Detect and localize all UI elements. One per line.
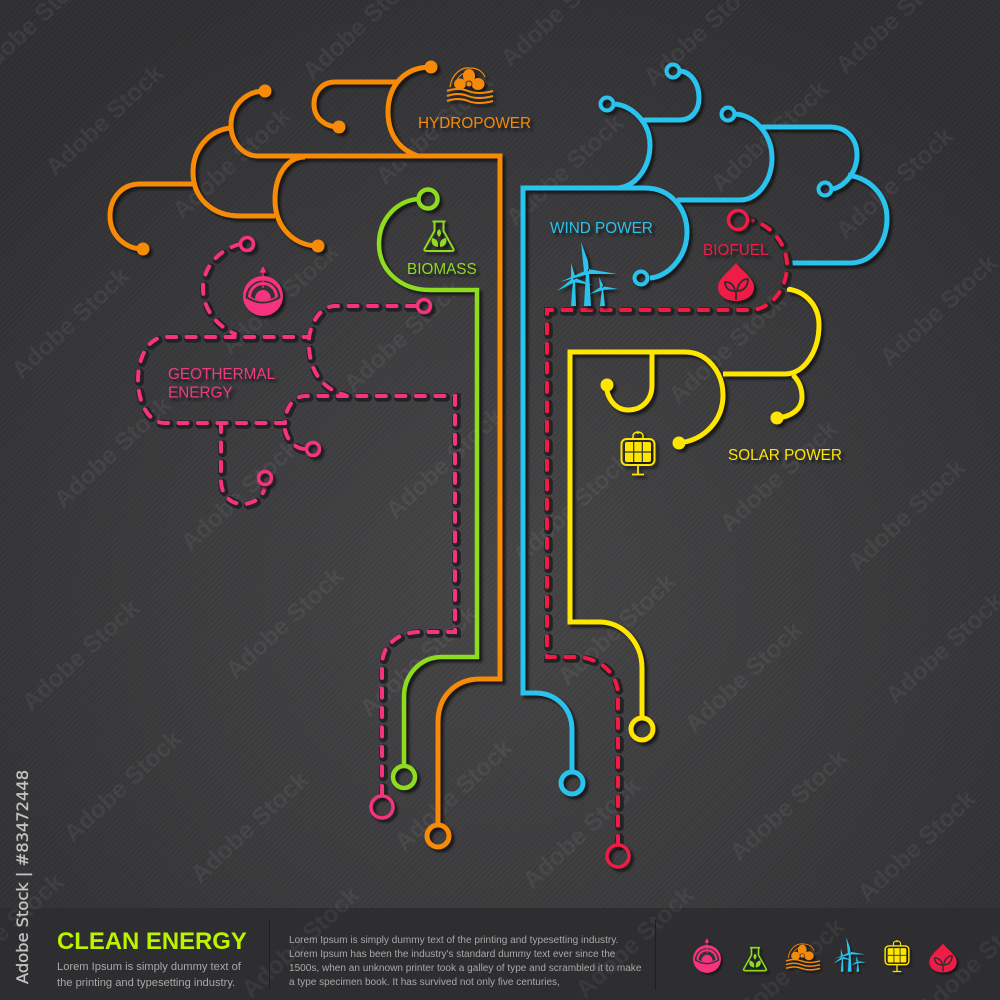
stock watermarks: Adobe Stock	[221, 562, 349, 684]
stock watermarks: Adobe Stock	[875, 249, 1000, 371]
stock watermarks: Adobe Stock	[390, 734, 518, 856]
icon: biofuel drop	[718, 263, 754, 301]
stock watermarks: Adobe Stock	[706, 75, 834, 197]
footer paragraph: 1500s, when an unknown printer took a galley of type and scrambled it to make	[289, 963, 642, 974]
footer icon: drop	[929, 944, 957, 972]
label: hydropower: HYDROPOWER	[418, 115, 531, 132]
stock watermarks: Adobe Stock	[501, 109, 629, 231]
stock watermarks: Adobe Stock	[381, 402, 509, 524]
footer paragraph: a type specimen book. It has survived not only five centuries,	[289, 977, 560, 988]
footer icon: earth	[693, 939, 721, 973]
footer paragraph: Lorem Ipsum has been the industry's standard dummy text ever since the	[289, 949, 616, 960]
footer watermarks: Adobe Stock	[237, 881, 365, 1000]
orange hydropower tree	[110, 60, 500, 847]
footer icon: solar	[885, 940, 909, 971]
label: solar power: SOLAR POWER	[728, 447, 842, 464]
label: geothermal energy: GEOTHERMAL	[168, 366, 275, 383]
label: wind power: WIND POWER	[550, 220, 653, 237]
footer paragraph: Lorem Ipsum is simply dummy text of the printing and typesetting industry.	[289, 935, 618, 946]
footer icon: flask	[744, 948, 766, 971]
stock watermarks: Adobe Stock	[553, 568, 681, 690]
stock watermarks: Adobe Stock	[355, 600, 483, 722]
footer icon: wind	[833, 937, 866, 972]
icon: wind turbines	[557, 242, 618, 306]
stock watermarks: Adobe Stock	[41, 59, 169, 181]
stock watermarks: Adobe Stock	[176, 434, 304, 556]
footer subtitle: Lorem Ipsum is simply dummy text of	[57, 961, 242, 973]
stock watermarks: Adobe Stock	[518, 772, 646, 894]
stock watermarks: Adobe Stock	[339, 275, 467, 397]
stock watermarks: Adobe Stock	[831, 122, 959, 244]
footer subtitle: the printing and typesetting industry.	[57, 977, 235, 989]
stock watermarks: Adobe Stock	[853, 785, 981, 907]
label: biofuel: BIOFUEL	[703, 242, 768, 259]
pink geothermal dashed tree	[138, 238, 456, 818]
stock watermarks: Adobe Stock	[725, 744, 853, 866]
stock watermarks: Adobe Stock	[49, 391, 177, 513]
stock watermarks: Adobe Stock	[186, 766, 314, 888]
stock watermarks: Adobe Stock	[17, 594, 145, 716]
footer watermarks: Adobe Stock	[571, 881, 699, 1000]
stock watermarks: Adobe Stock	[371, 68, 499, 190]
icon: biomass flask	[424, 222, 454, 251]
stock watermarks: Adobe Stock	[664, 287, 792, 409]
red biofuel dashed line	[547, 210, 788, 867]
stock watermarks: Adobe Stock	[7, 262, 135, 384]
stock watermarks: Adobe Stock	[680, 616, 808, 738]
footer title: CLEAN ENERGY	[57, 928, 247, 955]
green biomass line	[379, 190, 477, 788]
footer icon: hydro	[786, 944, 820, 970]
icon: geothermal earth	[243, 268, 283, 316]
footer watermarks	[0, 868, 1000, 1000]
stock watermarks: Adobe Stock	[216, 238, 344, 360]
footer divider left	[269, 920, 270, 990]
stock watermarks: Adobe Stock	[508, 447, 636, 569]
stock watermarks: Adobe Stock	[715, 415, 843, 537]
icon: solar panel	[622, 431, 654, 474]
vertical stock id: Adobe Stock | #83472448	[13, 770, 32, 984]
footer icon row	[693, 937, 957, 973]
label: geothermal energy: ENERGY	[168, 384, 233, 402]
yellow solar power tree	[570, 289, 819, 740]
blue wind power tree	[523, 64, 887, 794]
stock watermarks: Adobe Stock	[168, 102, 296, 224]
stock watermarks: Adobe Stock	[843, 454, 971, 576]
icon: hydropower	[447, 68, 493, 103]
footer panel background	[0, 908, 1000, 1000]
stock watermarks: Adobe Stock	[59, 725, 187, 847]
footer divider right	[655, 920, 656, 990]
label: biomass: BIOMASS	[407, 261, 477, 278]
